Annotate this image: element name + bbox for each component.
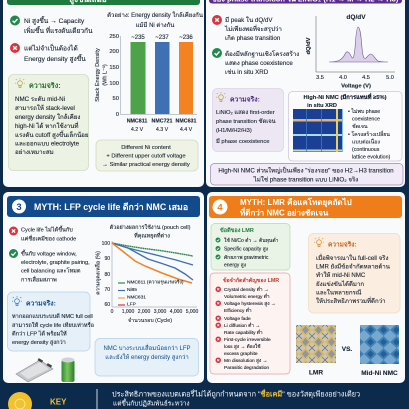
panel: LMR limitations: Crystal density ต่ำ → xyxy=(224,286,269,293)
panel: LMR limitations: Volumetric energy ต่ำ xyxy=(224,293,270,300)
note: H2 to H3 xyxy=(210,164,403,185)
claim: not only chemistry: Cycle life ไม่ได้ขึ้นกับ xyxy=(21,226,73,234)
line chart: capacity retention: จำนวนรอบ (Cycle) xyxy=(128,317,172,324)
callout: truth: อย่างเหมาะสม xyxy=(15,149,54,156)
line chart: capacity retention: 90 xyxy=(104,256,110,262)
line chart: capacity retention: 70 xyxy=(104,287,110,293)
panel 1 header xyxy=(7,0,200,5)
line chart: dQ/dV: 4.5 xyxy=(362,75,370,81)
panel: LMR advantages: ใช้ Ni/Co ต่ำ → ต้นทุนต่ำ xyxy=(224,237,279,244)
line chart: capacity retention xyxy=(94,224,198,324)
panel: LMR limitations xyxy=(210,273,290,374)
chart legend: Ni85 xyxy=(127,287,137,293)
bar chart: stack energy density: 100 xyxy=(109,81,119,87)
bar chart: stack energy density xyxy=(95,11,203,133)
callout: truth: ความจริง: xyxy=(230,96,260,104)
panel 4 header: 4 xyxy=(217,202,223,214)
bar chart: stack energy density: 4.4 V xyxy=(180,127,193,133)
callout: truth xyxy=(212,88,284,152)
claim: depends on design xyxy=(9,249,90,284)
callout: truth: สามารถให้ cycle life เทียบเท่าหรือ xyxy=(12,322,94,329)
crystal: LMR xyxy=(296,325,336,376)
claim: peak not sufficient xyxy=(212,15,282,42)
line chart: dQ/dV: dQ/dV xyxy=(306,37,312,55)
panel: LMR limitations: Parasitic degradation xyxy=(224,365,269,371)
note: H2 to H3: ไม่ใช่ phase transition แบบ LiNiO₂ จริง xyxy=(253,176,358,184)
panel: in situ XRD xyxy=(288,92,402,161)
panel: in situ XRD: • โครงสร้างเปลี่ยน xyxy=(348,130,390,138)
panel: LMR limitations: Voltage fade xyxy=(224,316,251,322)
panel: LMR limitations: Rate capability ต่ำ xyxy=(224,329,263,336)
bar chart: stack energy density: 150 xyxy=(109,65,119,71)
callout: truth: ความจริง: xyxy=(328,240,357,248)
line chart: capacity retention: ตัวอย่างผลการใช้งาน (pouch cell) xyxy=(110,224,191,231)
vs label: VS. xyxy=(342,346,352,353)
callout: truth: high-Ni ได้ หากใช้งานที่ xyxy=(15,122,78,130)
callout: truth xyxy=(8,74,89,170)
line chart: capacity retention: 100 xyxy=(102,241,110,247)
claim: energy density not guaranteed xyxy=(10,43,86,63)
line chart: capacity retention: ความจุคงเหลือ (%) xyxy=(94,251,102,295)
panel 3 header xyxy=(7,196,200,217)
claim: depends on design: electrolyte, graphite pairing, xyxy=(21,260,90,266)
panel: LMR advantages xyxy=(211,224,290,270)
callout: truth: energy density สูงกว่า xyxy=(12,339,66,346)
crystal: mid-Ni NMC: Mid-Ni NMC xyxy=(361,370,398,377)
bar chart: stack energy density: 250 xyxy=(109,34,119,40)
callout: truth: เมื่อพิจารณาใน full-cell จริง xyxy=(316,254,388,262)
line chart: capacity retention: 1,000 xyxy=(122,309,134,315)
claim: peak not sufficient: เกิด phase transition xyxy=(225,35,281,42)
chart legend: NMC811 (ความรุนแรงจริง) xyxy=(127,280,184,286)
callout: truth xyxy=(8,292,94,351)
claim: not only chemistry xyxy=(9,226,76,242)
icon: bulb xyxy=(12,296,22,306)
line chart: dQ/dV: dQ/dV xyxy=(346,14,366,21)
bar chart: stack energy density: 4.2 V xyxy=(131,127,144,133)
takeaway text xyxy=(112,388,360,408)
line chart: capacity retention: 4,000 xyxy=(170,309,182,315)
claim: depends on design: การเสื่อมสภาพ xyxy=(21,276,57,284)
claim: peak not sufficient: ไม่เพียงพอที่จะสรุปว่า xyxy=(224,25,282,33)
icon: bulb xyxy=(314,237,324,246)
claim: need structural evidence: แสดง phase coexistence xyxy=(225,60,293,67)
line chart: dQ/dV: Voltage (V) xyxy=(341,84,371,90)
line chart: dQ/dV: 5.0 xyxy=(386,75,394,81)
panel: LMR limitations: Efficiency ต่ำ xyxy=(224,307,252,314)
claim: depends on design: cell balancing และโหมด xyxy=(21,266,81,274)
note: similar practical energy density: → Similar practical energy density xyxy=(102,162,190,168)
panel: myth 4 LMR xyxy=(207,192,405,383)
callout: truth: ดีกว่า LFP ได้ พร้อมให้ xyxy=(12,330,67,338)
callout: truth: และออกแบบ electrolyte xyxy=(15,140,80,148)
panel: in situ XRD: lattice evolution) xyxy=(352,154,391,160)
icon: bulb xyxy=(216,92,226,102)
line chart: capacity retention: 2,000 xyxy=(138,309,150,315)
panel: LMR limitations: ข้อจำกัดสำคัญของ LMR xyxy=(223,276,279,284)
claim: capacity rises: Ni สูงขึ้น → Capacity xyxy=(24,16,85,25)
panel 4 header: MYTH: LMR คือแคโทดยุคถัดไป xyxy=(240,197,352,208)
bar chart: stack energy density: Stack Energy Density xyxy=(95,48,101,102)
bar chart: stack energy density: 50 xyxy=(113,96,119,102)
panel: LMR limitations: Li diffusion ต่ำ → xyxy=(224,322,260,329)
bar chart: stack energy density: 4.3 V xyxy=(156,127,169,133)
panel: in situ XRD: ชัดเจน xyxy=(352,123,368,130)
callout: truth: ความจริง: xyxy=(29,81,61,90)
callout: truth: แรงดัน cutoff สูงขึ้นเล็กน้อย xyxy=(15,130,89,139)
panel: LMR limitations: loss สูง → ต้องใช้ xyxy=(224,343,261,350)
panel: LMR advantages: energy สูง xyxy=(224,262,247,268)
panel: LMR limitations: First-cycle irreversible xyxy=(224,337,271,343)
panel: LMR limitations: Voltage hysteresis สูง → xyxy=(224,301,276,307)
panel: in situ XRD: coexistence xyxy=(352,116,380,122)
panel: myth 3 LFP cycle life xyxy=(3,192,204,383)
claim: need structural evidence xyxy=(212,48,299,76)
bar chart: stack energy density: ~235 xyxy=(131,35,145,41)
claim: capacity rises: เพิ่มขึ้น ที่แรงดันเดียวกัน xyxy=(24,26,93,35)
bar chart: stack energy density: NMC631 xyxy=(176,118,197,124)
callout: truth: NMC ระดับ mid-Ni xyxy=(15,96,65,103)
panel: LMR advantages: Specific capacity สูง xyxy=(224,246,269,252)
callout: truth: ให้ประสิทธิภาพรวมที่ดีกว่า xyxy=(316,297,386,305)
icon: pouch cell xyxy=(16,358,53,382)
bar chart: stack energy density: NMC811 xyxy=(127,118,147,124)
callout: truth: ทำให้ mid-Ni NMC xyxy=(316,271,366,279)
callout: truth: (H1/M/H2/H3) xyxy=(216,128,252,134)
icon: bulb xyxy=(15,78,25,88)
crystal: mid-Ni NMC xyxy=(360,325,399,377)
panel: in situ XRD: High-Ni NMC (มีการแทนที่ ≥5%) xyxy=(303,92,387,101)
note: similar practical energy density: + Different upper cutoff voltage xyxy=(106,154,186,160)
panel: myth 2 phase transition xyxy=(206,0,405,187)
note: NMC degrades less: NMC บางระบบเสื่อมน้อยกว่า LFP xyxy=(103,344,191,352)
panel: in situ XRD: (continuous xyxy=(352,147,380,153)
panel 4 header: ที่ดีกว่า NMC อย่างชัดเจน xyxy=(240,206,329,218)
callout: truth: LiNiO₂ แสดง first-order xyxy=(216,109,275,116)
chart legend: NMC631 xyxy=(127,294,146,300)
takeaway text: แต่ขึ้นกับปฏิสัมพันธ์ระหว่าง xyxy=(113,398,190,408)
line chart: capacity retention: ที่คุณหยุดที่ต่าง xyxy=(134,232,170,240)
footer: key takeaway: KEY xyxy=(50,398,67,406)
bar chart: stack energy density: 0 xyxy=(116,112,119,118)
callout: truth: และในหลายกรณี xyxy=(316,288,362,296)
footer: key takeaway xyxy=(8,388,360,409)
panel: myth 1 energy density xyxy=(3,0,204,187)
line chart: capacity retention: 5,000 xyxy=(186,309,198,315)
crystal: LMR: LMR xyxy=(309,370,323,376)
chart legend xyxy=(118,280,184,308)
claim: capacity rises xyxy=(10,16,93,35)
callout: truth: มี phase coexistence xyxy=(216,138,269,145)
panel: in situ XRD: แบบต่อเนื่อง xyxy=(352,138,380,146)
bar chart: stack energy density: (Wh L⁻¹) xyxy=(102,64,108,86)
panel: LMR advantages: ข้อดีของ LMR xyxy=(220,226,254,234)
panel 3 header: MYTH: LFP cycle life ดีกว่า NMC เสมอ xyxy=(34,202,188,212)
line chart: capacity retention: 3,000 xyxy=(154,309,166,315)
claim: energy density not guaranteed: แต่ไม่จำเป็นต้องได้ xyxy=(24,44,78,52)
bar chart: stack energy density: แม้มี Ni ต่างกัน xyxy=(136,21,174,29)
bar chart: stack energy density: NMC721 xyxy=(152,118,173,124)
chart legend: LFP xyxy=(127,302,136,308)
panel: LMR limitations: excess graphite xyxy=(224,351,258,357)
note: H2 to H3: High-Ni NMC ส่วนใหญ่เป็นเพียง "ร่องรอย" ของ H2→H3 transition xyxy=(218,166,394,174)
claim: not only chemistry: แค่ชื่อเคมีของ cathode xyxy=(21,234,76,242)
callout: truth xyxy=(308,234,400,313)
claim: need structural evidence: ต้องมีหลักฐานเชิงโครงสร้าง xyxy=(225,50,299,58)
icon: key bulb xyxy=(8,392,32,409)
bar chart: stack energy density: ตัวอย่าง: Energy density ใกล้เคียงกัน xyxy=(107,11,203,19)
claim: need structural evidence: เช่น in situ XRD xyxy=(225,69,269,76)
bar chart: stack energy density: 200 xyxy=(109,49,119,55)
panel: in situ XRD: • ไม่พบ phase xyxy=(348,107,380,115)
callout: truth: energy density ใกล้เคียง xyxy=(15,113,80,121)
callout: truth: สามารถให้ stack-level xyxy=(15,104,75,112)
line chart: capacity retention: 0 xyxy=(111,309,114,315)
callout: truth: หากออกแบบระบบดี NMC full cell xyxy=(12,313,93,320)
callout: truth: ความจริง: xyxy=(26,300,56,308)
panel: in situ XRD: in situ XRD xyxy=(307,103,337,109)
takeaway text: ประสิทธิภาพของแบตเตอรี่ไม่ได้ถูกกำหนดจาก "ชื่อเคมี" ของวัสดุเพียงอย่างเดียว xyxy=(112,388,360,398)
callout: truth: phase transition ชัดเจน xyxy=(216,117,276,125)
panel: LMR advantages: ศักยภาพ gravimetric xyxy=(224,255,269,261)
XRD heatmap xyxy=(293,109,343,152)
panel: LMR limitations: Mn dissolution สูง → xyxy=(224,358,267,364)
icon: green battery xyxy=(62,358,74,382)
note: NMC degrades less: และยังให้ energy density สูงกว่า xyxy=(105,353,189,361)
line chart: dQ/dV: 3.5 xyxy=(316,75,324,81)
callout: truth: ยังแข่งขันได้ดีมาก xyxy=(316,280,364,288)
panel 3 header: 3 xyxy=(16,202,22,213)
line chart: capacity retention: 60 xyxy=(104,302,110,308)
claim: energy density not guaranteed: Energy density สูงขึ้น xyxy=(24,54,86,63)
panel 4 header xyxy=(209,196,402,218)
callout: truth: LMR ยังมีข้อจำกัดหลายด้าน xyxy=(316,262,391,270)
line chart: dQ/dV xyxy=(306,14,395,90)
bar chart: stack energy density: ~237 xyxy=(155,35,169,41)
note: similar practical energy density: Different Ni content xyxy=(121,145,171,151)
claim: depends on design: ขึ้นกับ voltage window, xyxy=(21,250,77,258)
note: similar practical energy density xyxy=(96,140,198,171)
note: NMC degrades less xyxy=(95,338,198,376)
claim: peak not sufficient: มี peak ใน dQ/dV xyxy=(225,16,273,24)
line chart: capacity retention: 80 xyxy=(104,272,110,278)
bar chart: stack energy density: ~236 xyxy=(179,35,193,41)
line chart: dQ/dV: 4.0 xyxy=(339,75,347,81)
